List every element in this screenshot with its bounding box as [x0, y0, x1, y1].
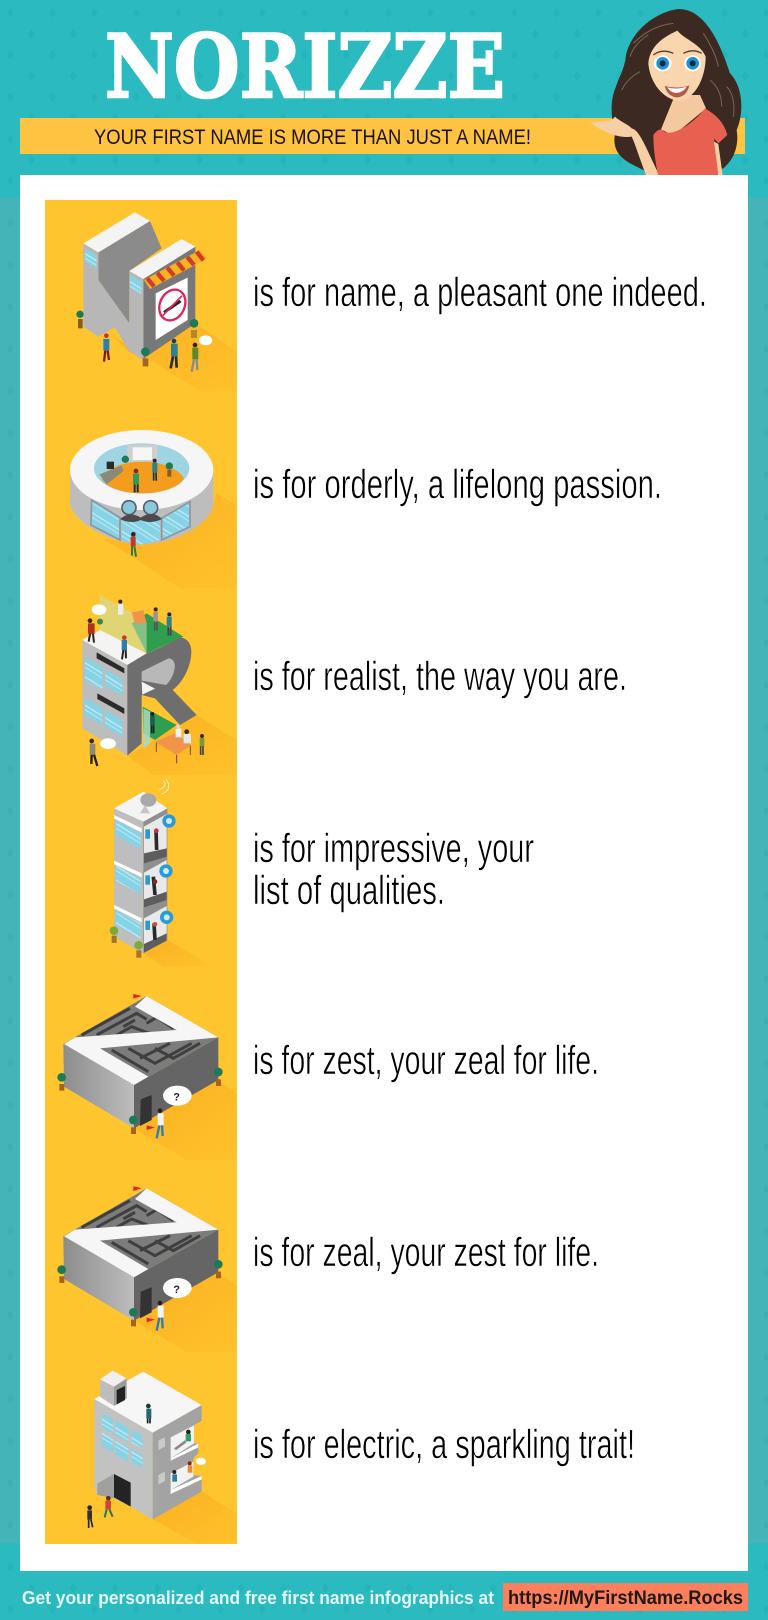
footer link badge: https://MyFirstName.Rocks	[508, 1588, 743, 1609]
illustration: letter E building	[87, 1371, 237, 1544]
no smoking sign	[154, 278, 190, 340]
people	[103, 333, 212, 372]
white Z roof	[64, 1188, 218, 1277]
windows	[114, 815, 142, 939]
illustration: letter I tower	[110, 779, 213, 967]
icon bubbles	[159, 814, 176, 924]
illustration: second letter Z maze	[57, 1186, 237, 1352]
eyes	[654, 55, 701, 71]
plants	[57, 1260, 223, 1326]
character: woman presenting	[591, 9, 741, 177]
banner strip	[20, 118, 745, 154]
person with question bubble: ?	[173, 1092, 180, 1104]
roof box	[100, 1371, 127, 1406]
glasses and moustache	[120, 501, 162, 522]
plants	[110, 926, 143, 958]
text: Z: is for zest, your zeal for life.	[253, 1037, 599, 1083]
tagline: YOUR FIRST NAME IS MORE THAN JUST A NAME!	[94, 125, 531, 149]
white Z roof	[64, 996, 218, 1085]
windows	[102, 1413, 143, 1468]
illustration: letter R building	[82, 595, 237, 775]
balconies	[144, 814, 167, 953]
windows and signs	[85, 652, 124, 737]
plants	[76, 311, 198, 366]
far arm	[714, 142, 723, 177]
people	[87, 1404, 206, 1528]
yellow illustration column	[45, 200, 237, 1544]
person with question bubble: ?	[173, 1284, 180, 1296]
plants	[57, 1068, 223, 1134]
title: NORIZZE	[105, 15, 505, 118]
person with question bubble	[157, 1278, 192, 1331]
satellite dish	[140, 779, 169, 813]
interior details	[99, 456, 173, 492]
text: I second line: list of qualities.	[253, 867, 445, 913]
text: second Z: is for zeal, your zest for life.	[253, 1229, 599, 1275]
text: I: is for impressive, your	[253, 825, 534, 871]
illustration: letter O building	[70, 430, 237, 588]
flags	[133, 1186, 155, 1322]
shirt	[653, 108, 727, 177]
arm and hand	[591, 117, 660, 177]
illustration: letter N building	[76, 212, 237, 392]
maze walls	[82, 1008, 200, 1072]
awning	[144, 250, 208, 289]
smile	[665, 85, 689, 97]
person	[131, 532, 136, 557]
table	[155, 733, 192, 763]
glass windows	[91, 500, 190, 545]
person with question bubble	[157, 1086, 192, 1138]
illustration: letter Z maze	[57, 994, 237, 1160]
footer note: Get your personalized and free first name infographics at	[22, 1588, 494, 1608]
entrance	[97, 1474, 131, 1507]
maze walls	[82, 1201, 200, 1264]
flags	[133, 994, 155, 1130]
people	[88, 600, 204, 766]
